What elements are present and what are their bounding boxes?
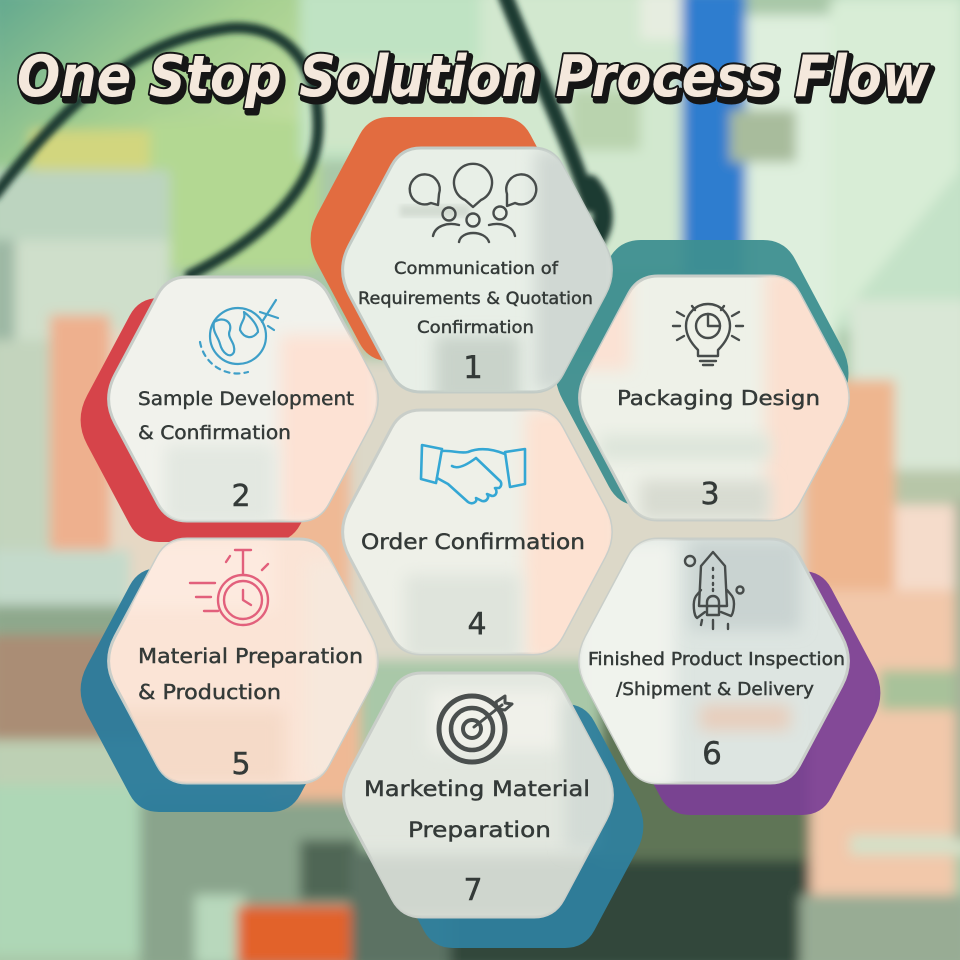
icon: rocket bbox=[685, 552, 744, 629]
number 6: 6 bbox=[702, 736, 722, 772]
number 2: 2 bbox=[231, 479, 251, 514]
hexagon backing: blue left bbox=[81, 568, 349, 812]
icon: stopwatch bbox=[190, 550, 268, 625]
text: step 7 label: Preparation bbox=[408, 818, 551, 842]
icon: people with speech bubbles bbox=[410, 164, 536, 242]
panel 6: finished product inspection bbox=[575, 539, 848, 790]
text: step 2 label: & Confirmation bbox=[138, 422, 291, 444]
hexagon backing: red bbox=[81, 298, 349, 542]
icon: target with arrow bbox=[439, 696, 512, 762]
hexagon backing: teal bbox=[556, 240, 848, 506]
panel 1: communication of requirements bbox=[343, 148, 620, 405]
background: black cables bbox=[0, 0, 603, 275]
panel 7: marketing material preparation bbox=[344, 673, 620, 920]
text: step 1 label: Confirmation bbox=[417, 318, 534, 338]
hexagon backing: blue bottom bbox=[375, 704, 643, 948]
text: step 7 label: Marketing Material bbox=[364, 777, 590, 801]
panel 3: packaging design bbox=[575, 270, 860, 530]
number 7: 7 bbox=[463, 873, 483, 908]
number 3: 3 bbox=[700, 477, 720, 512]
icon: handshake bbox=[421, 445, 525, 503]
hexagon backing: orange bbox=[311, 117, 579, 361]
number 5: 5 bbox=[231, 747, 251, 782]
text: step 5 label: & Production bbox=[138, 680, 281, 704]
hexagon backing: purple bbox=[612, 571, 880, 815]
panel 5: material preparation bbox=[105, 539, 380, 785]
text: step 2 label: Sample Development bbox=[138, 388, 354, 410]
text: step 6 label: /Shipment & Delivery bbox=[616, 680, 814, 700]
icon: globe with plane bbox=[200, 300, 278, 373]
panel 4: order confirmation bbox=[343, 410, 620, 660]
panel 2: sample development bbox=[109, 277, 380, 525]
text: step 1 label: Requirements & Quotation bbox=[358, 289, 593, 309]
coloured offset hexagons behind the glass panels bbox=[81, 117, 880, 948]
text: step 5 label: Material Preparation bbox=[138, 644, 363, 668]
text: step 4 label: Order Confirmation bbox=[361, 530, 585, 554]
text: step 1 label: Communication of bbox=[394, 259, 559, 279]
number 1: 1 bbox=[463, 350, 483, 386]
text: step 6 label: Finished Product Inspection bbox=[588, 650, 845, 670]
number 4: 4 bbox=[467, 607, 487, 642]
icon: light bulb with pie chart bbox=[673, 304, 743, 365]
text: step 3 label: Packaging Design bbox=[617, 386, 820, 410]
